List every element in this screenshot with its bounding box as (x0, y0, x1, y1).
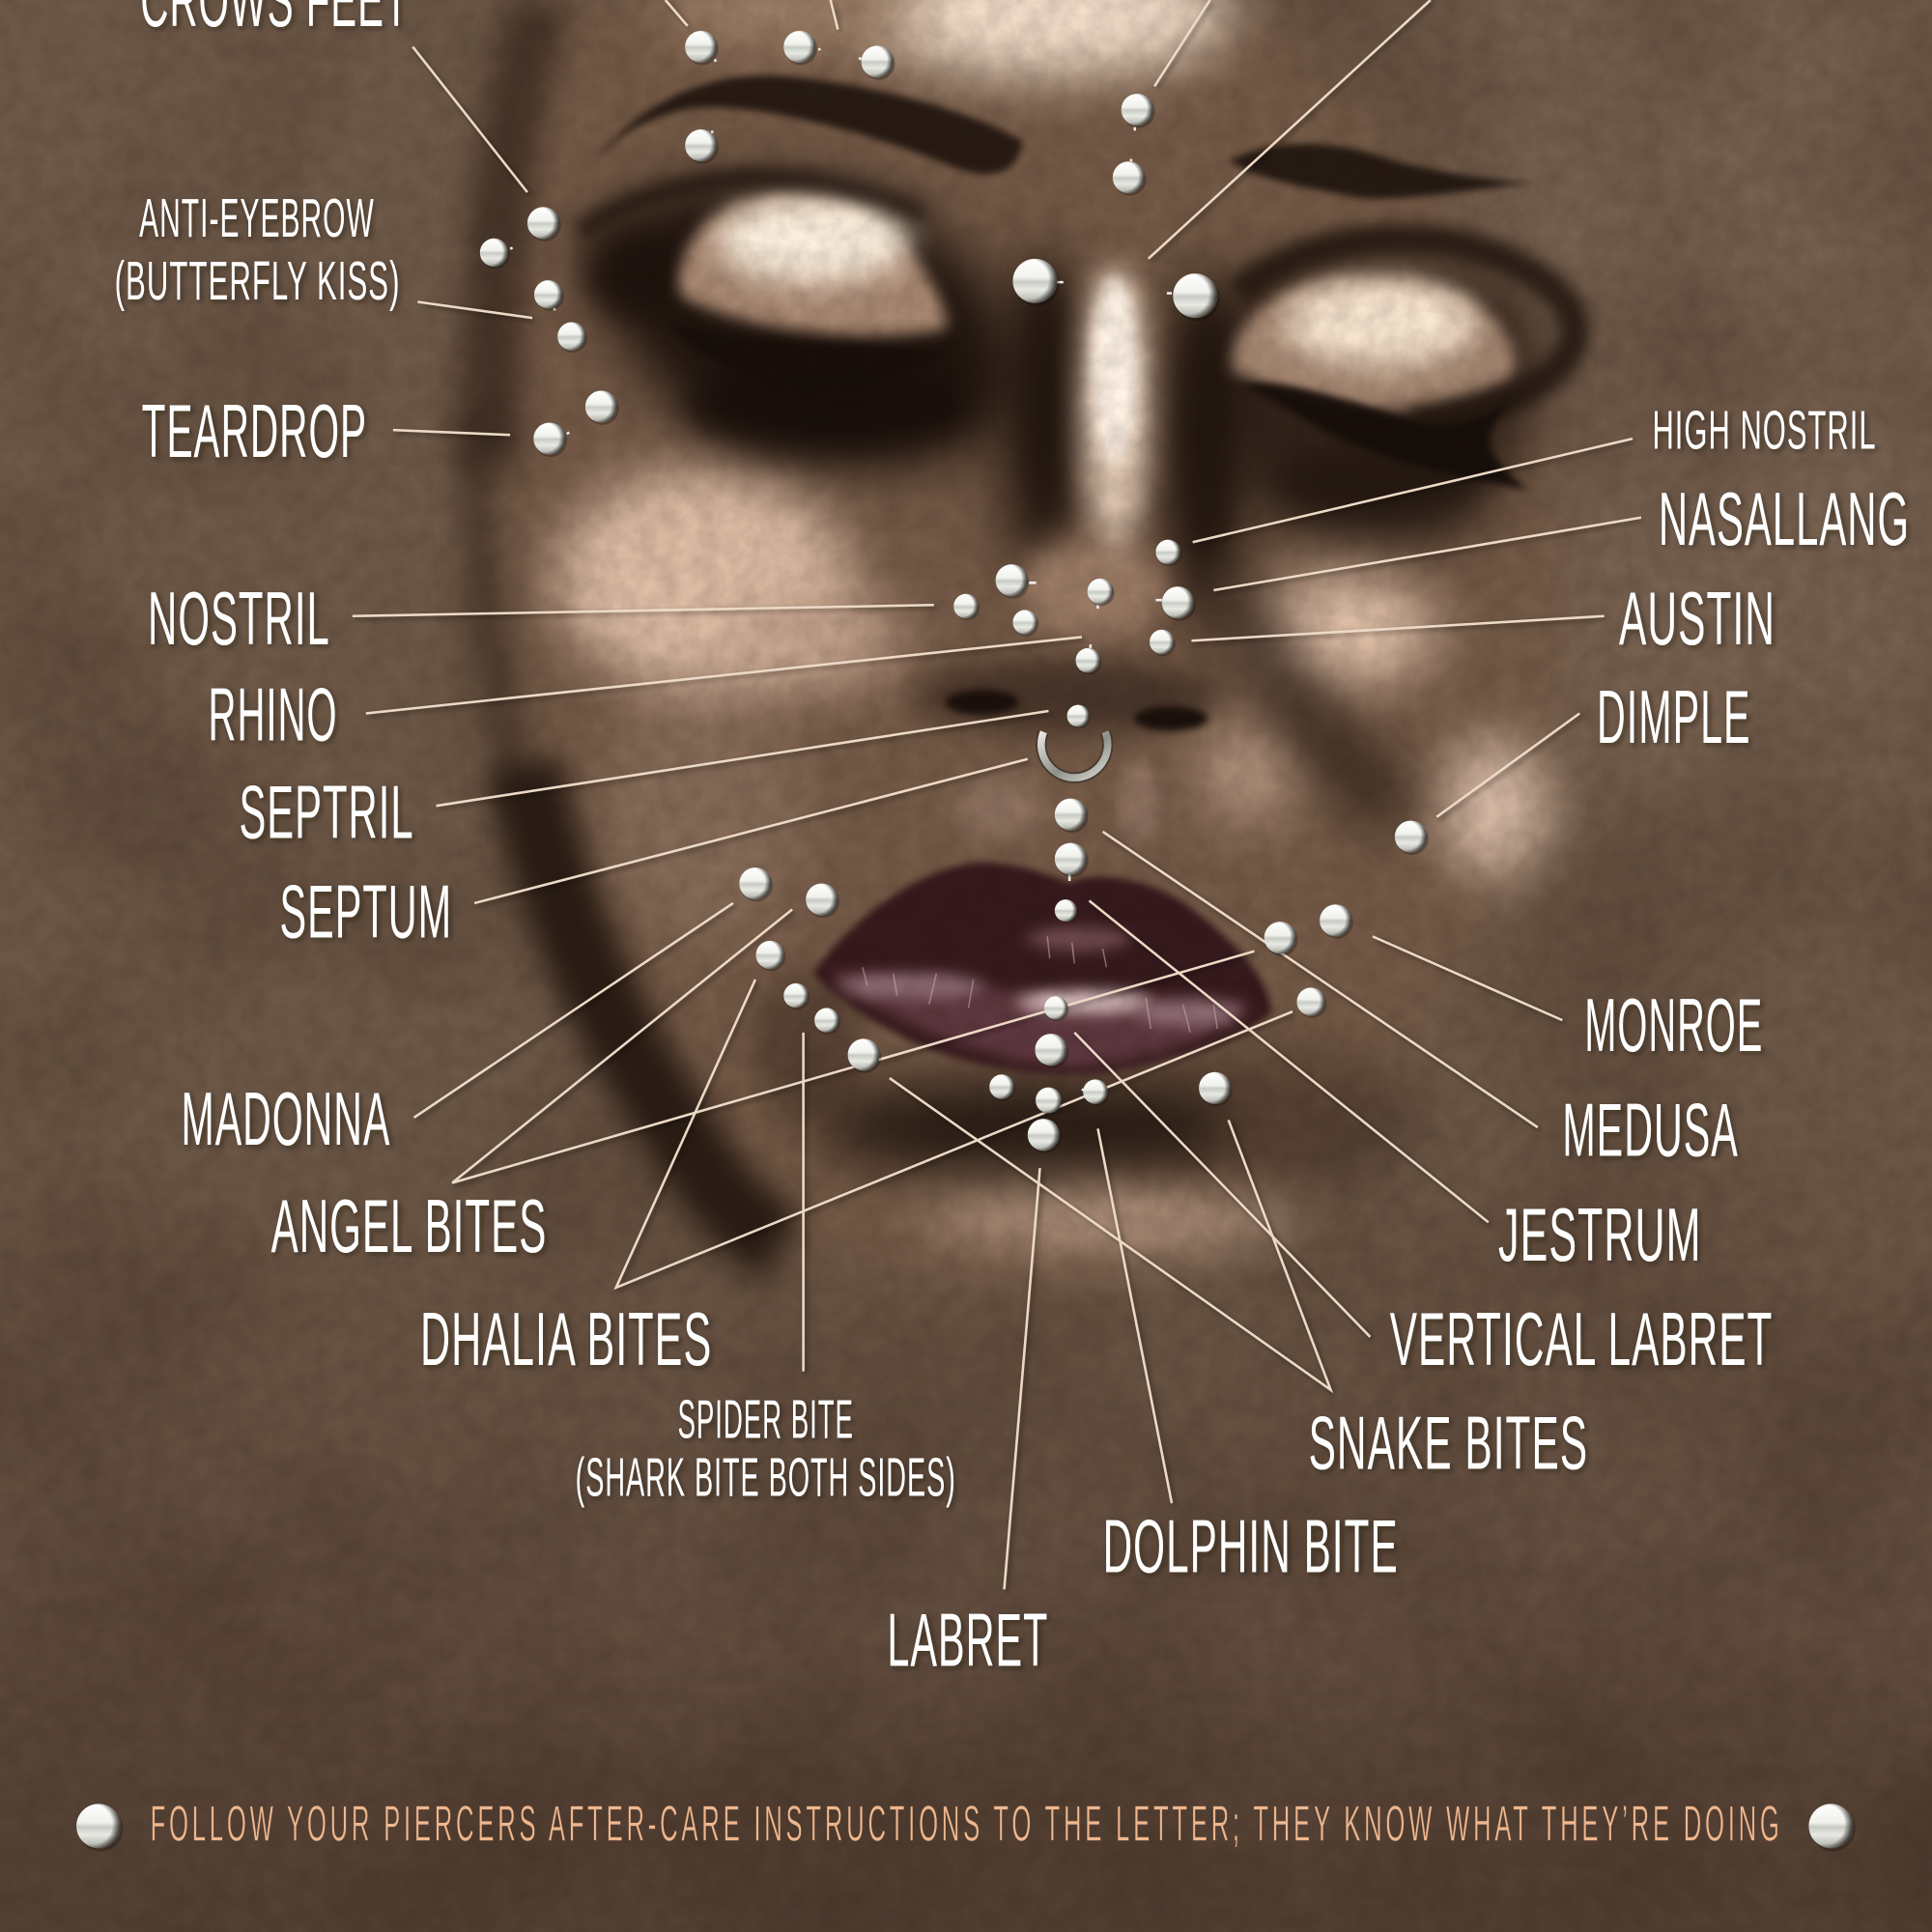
label: dolphin bite (1097, 1128, 1399, 1589)
label: labret: LABRET (887, 1599, 1048, 1682)
leader: upper eyebrow (831, 0, 838, 30)
label: monroe: MONROE (1584, 984, 1763, 1067)
leader: upper left eyebrow (666, 0, 688, 26)
nose side shadows (1005, 246, 1078, 591)
label: austin: AUSTIN (1619, 578, 1776, 661)
label: angel bites (271, 909, 1254, 1268)
label: madonna (182, 903, 733, 1161)
label: nostril (148, 578, 934, 661)
below-lip shadow (813, 1081, 1233, 1175)
left lower lash line (671, 323, 944, 389)
label: septum: SEPTUM (280, 871, 452, 954)
chin light (918, 1186, 1312, 1240)
right jaw shadow (1220, 579, 1405, 813)
left eyelid (679, 194, 949, 335)
label: dimple (1436, 676, 1750, 817)
label: anti-eyebrow (115, 187, 532, 318)
right eyelid (1233, 276, 1514, 410)
label: dolphin bite: DOLPHIN BITE (1103, 1506, 1399, 1589)
label: labret (887, 1168, 1048, 1682)
label: snake bites (890, 1078, 1588, 1485)
lips (813, 863, 1271, 1074)
icon: septum ring (1041, 732, 1108, 778)
label: vertical labret (1074, 1033, 1773, 1381)
upper lip skin lights (953, 778, 1047, 837)
left upper lid crease (579, 178, 924, 234)
left under-eye core (684, 363, 967, 450)
left mid-cheek light (598, 678, 807, 949)
label: nostril: NOSTRIL (148, 578, 330, 661)
label: septum (280, 759, 1028, 954)
mouth corner shadow (752, 974, 863, 1122)
icon: footer bead right (1808, 1804, 1856, 1851)
lower-right face shadow (1122, 1047, 1417, 1195)
left upper contour shadow (492, 0, 542, 469)
right cheek lights (1249, 574, 1436, 688)
nose tip (1014, 540, 1167, 639)
label: dhalia bites (420, 980, 1293, 1381)
label: snake bites: SNAKE BITES (1309, 1402, 1588, 1485)
label: crows feet (140, 0, 527, 192)
label: high nostril (1193, 399, 1877, 542)
label: septril: SEPTRIL (239, 771, 414, 854)
label: angel bites: ANGEL BITES (271, 1185, 547, 1268)
right under-eye core (1275, 443, 1485, 518)
label: monroe (1373, 936, 1763, 1067)
left lower contour shadow (524, 764, 782, 1247)
right lash line (1239, 384, 1528, 489)
footer note (76, 1797, 1856, 1853)
under-nose shadow (912, 659, 1220, 733)
nostrils (945, 690, 1019, 715)
face base tone (493, 0, 1568, 1287)
label: dhalia bites: DHALIA BITES (420, 1298, 712, 1381)
label: spider bite: SPIDER BITE (678, 1389, 854, 1450)
nose bridge highlight (1083, 265, 1148, 549)
label: jestrum (1090, 900, 1701, 1277)
icon: piercing beads (480, 31, 1429, 1153)
label: madonna: MADONNA (182, 1078, 390, 1161)
left socket shadow (579, 183, 1018, 468)
left eyebrow (591, 75, 1023, 174)
label: anti-eyebrow: ANTI-EYEBROW (139, 187, 375, 248)
label: nasallang (1213, 478, 1910, 590)
right eyebrow (1229, 144, 1540, 199)
label: spider bite (576, 1033, 956, 1507)
label: septril (239, 711, 1048, 854)
icon: footer bead left (76, 1804, 123, 1851)
label: medusa: MEDUSA (1562, 1089, 1739, 1172)
label: austin (1191, 578, 1776, 661)
label: dimple: DIMPLE (1597, 676, 1750, 759)
left eye outer corner shadow (587, 238, 681, 317)
left cheek light (554, 469, 850, 690)
label: anti-eyebrow: (BUTTERFLY KISS) (115, 250, 401, 311)
leader: bridge lower (1149, 0, 1431, 259)
right socket shadow (1209, 255, 1538, 551)
forehead light (863, 0, 1233, 76)
label: medusa (1103, 832, 1739, 1172)
label: rhino (209, 637, 1082, 757)
label: teardrop: TEARDROP (142, 390, 367, 473)
label: jestrum: JESTRUM (1498, 1194, 1701, 1277)
label: spider bite: (SHARK BITE BOTH SIDES) (576, 1446, 956, 1507)
right upper lid rim (1238, 239, 1575, 421)
leader: bridge upper (1154, 0, 1210, 86)
label: rhino: RHINO (209, 674, 337, 757)
icon: piercing studs tips (510, 49, 1172, 1091)
